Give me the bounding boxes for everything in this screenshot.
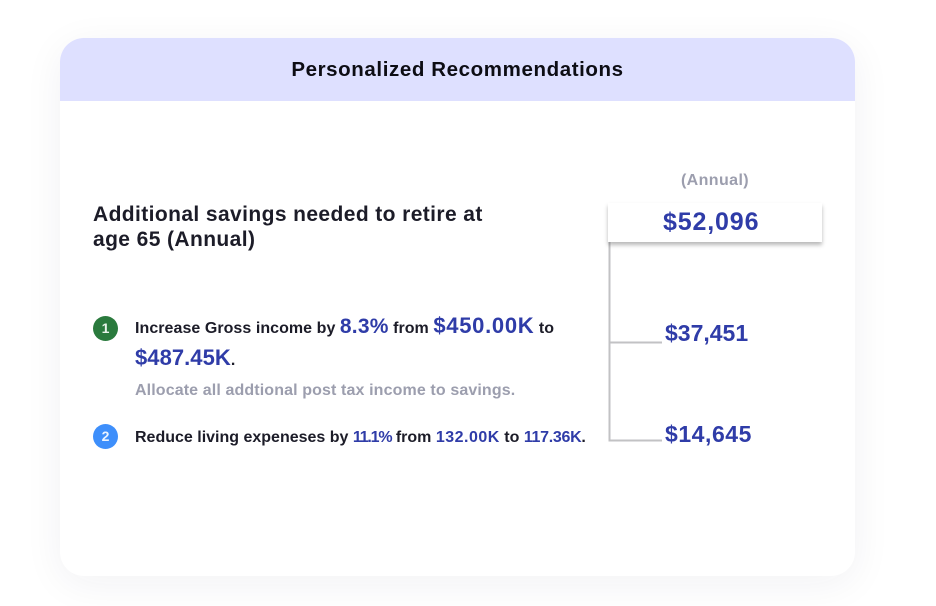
panel: recommendations card xyxy=(60,38,855,576)
total value box: $52,096 xyxy=(663,208,759,236)
label: annual: (Annual) xyxy=(681,172,749,189)
icon: step 1 badge xyxy=(93,316,118,341)
title: Personalized Recommendations xyxy=(291,58,624,81)
value: option 2: $14,645 xyxy=(665,421,752,447)
icon: step 2 badge xyxy=(93,424,118,449)
total value box xyxy=(608,203,822,242)
text: recommendation 1 line 2: $487.45K. xyxy=(135,345,235,370)
text: allocation note: Allocate all addtional post tax income to savings. xyxy=(135,382,515,399)
icon: step 2 badge: 2 xyxy=(102,428,109,444)
text: recommendation 1 line 1: Increase Gross income by 8.3% from $450.00K to xyxy=(135,313,554,338)
heading: additional savings xyxy=(93,203,483,251)
text: recommendation 2: Reduce living expeneses by 11.1% from 132.00K to 117.36K. xyxy=(135,429,586,446)
connector lines xyxy=(608,242,662,442)
value: option 1: $37,451 xyxy=(665,320,748,346)
heading: additional savings: Additional savings needed to retire at xyxy=(93,203,483,226)
heading: additional savings: age 65 (Annual) xyxy=(93,228,255,251)
icon: step 1 badge: 1 xyxy=(102,320,109,336)
panel header band xyxy=(60,38,855,101)
